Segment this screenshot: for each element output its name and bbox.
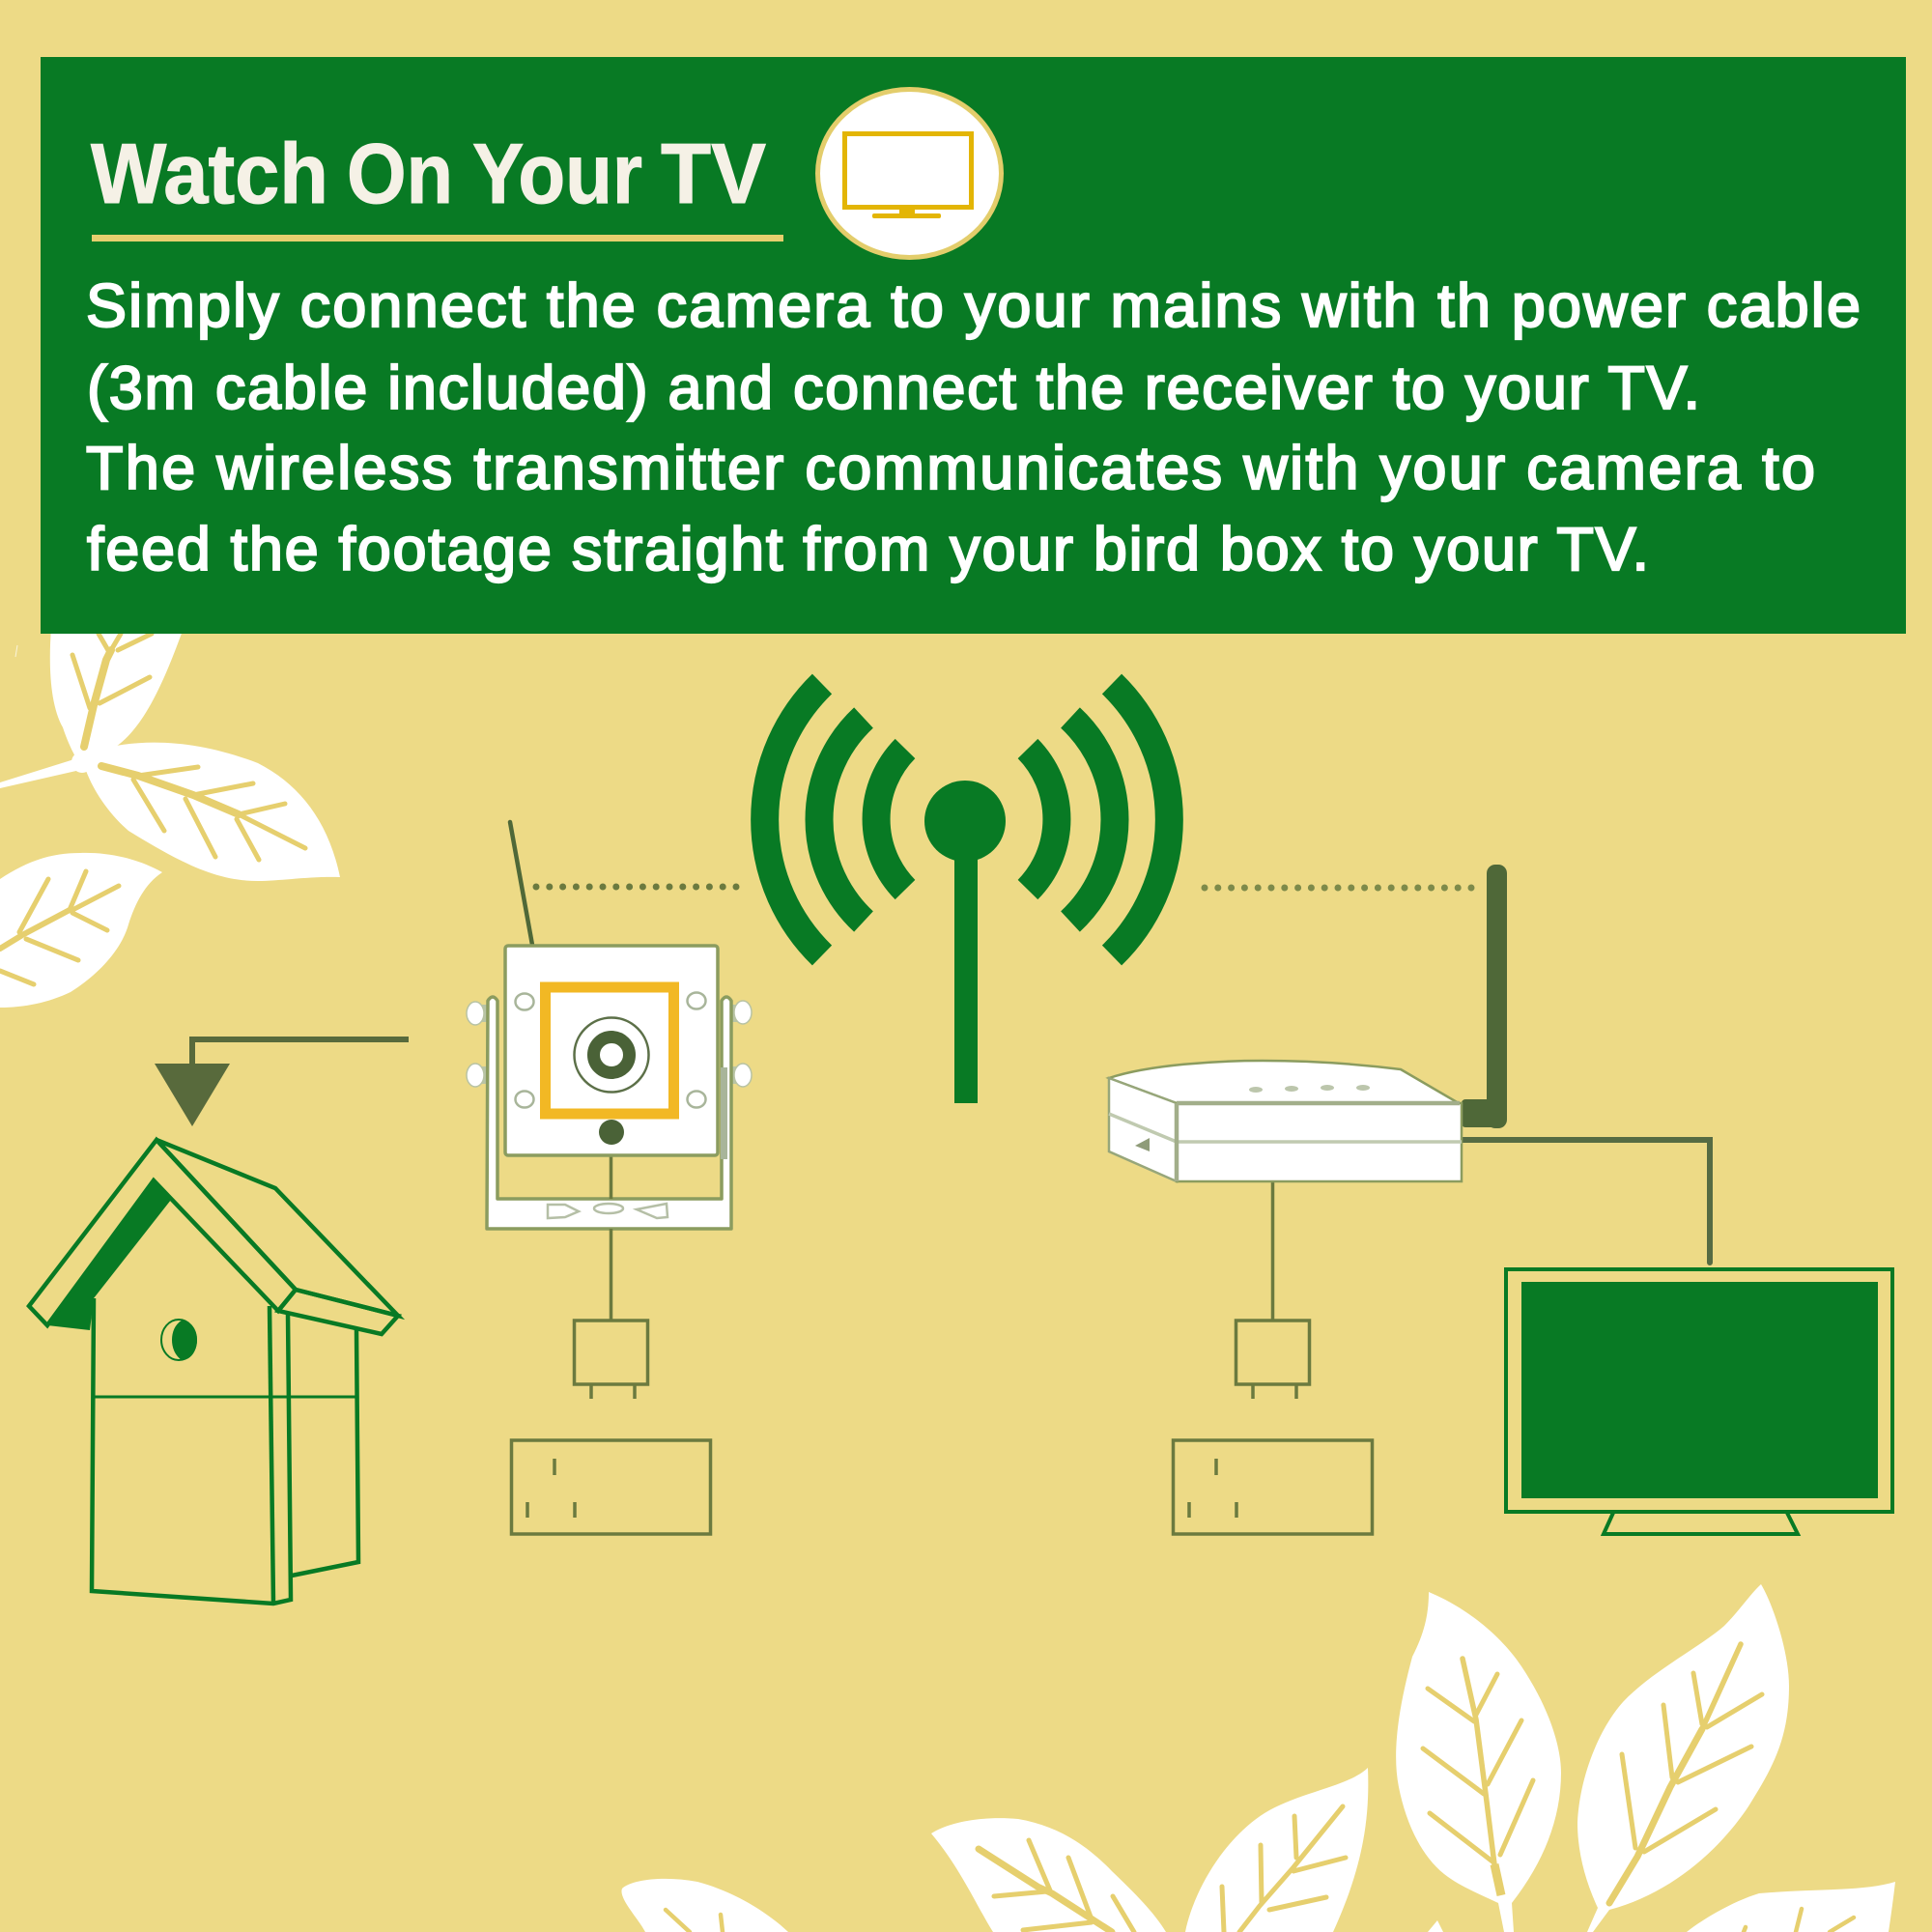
receiver antenna <box>1462 865 1507 1128</box>
bird box <box>29 1140 398 1604</box>
header panel <box>41 57 1906 634</box>
receiver box <box>1109 1061 1462 1181</box>
title: TV <box>661 126 766 221</box>
camera body <box>505 946 718 1155</box>
arrow: camera to bird box <box>155 1039 409 1126</box>
dotted link: camera to mast <box>536 883 737 891</box>
camera mounting bracket <box>467 997 752 1229</box>
body text <box>86 272 1861 583</box>
camera plug and socket <box>512 1321 711 1534</box>
camera antenna <box>510 822 532 945</box>
body text: feed the footage straight from your bird box to your TV. <box>87 516 1649 583</box>
receiver plug and socket <box>1173 1321 1372 1534</box>
camera lens frame <box>545 987 674 1114</box>
television <box>1506 1269 1892 1534</box>
camera <box>467 822 752 1321</box>
body text: Simply connect the camera to your mains with th power cable <box>86 272 1861 340</box>
camera wire <box>610 1155 612 1321</box>
title <box>91 126 766 221</box>
receiver <box>1109 865 1710 1321</box>
camera screw holes <box>516 993 705 1107</box>
title: Watch <box>91 126 328 221</box>
camera sensor dot <box>599 1120 624 1145</box>
body text: (3m cable included) and connect the receiver to your TV. <box>87 355 1700 422</box>
receiver wire <box>1271 1181 1274 1321</box>
leaf cluster: bottom right <box>621 1584 1895 1932</box>
title: On <box>347 126 453 221</box>
camera lens <box>574 1018 649 1092</box>
body text: The wireless transmitter communicates with your camera to <box>86 435 1815 502</box>
icon: tv in circle <box>817 89 1001 257</box>
title: Your <box>472 126 642 221</box>
title underline <box>92 235 783 242</box>
icon: wireless signal mast <box>765 684 1169 1103</box>
tv cable <box>1462 1140 1710 1263</box>
leaf cluster: top left <box>0 628 340 1008</box>
dotted link: mast to receiver <box>1205 885 1472 891</box>
